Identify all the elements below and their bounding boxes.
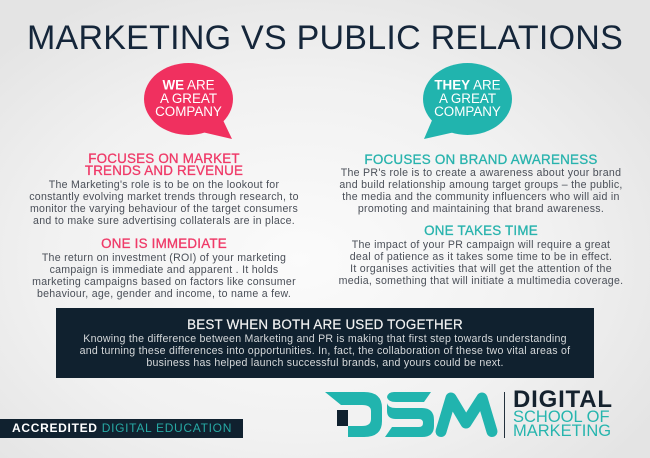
speech bubble: public relations: THEY ARE: [434, 78, 501, 92]
speech bubble: public relations: [423, 63, 512, 139]
speech bubble: marketing: [144, 63, 233, 139]
accreditation banner: ACCREDITED DIGITAL EDUCATION: [12, 421, 232, 435]
title: MARKETING VS PUBLIC RELATIONS: [27, 18, 623, 56]
PR text: focuses: The PR's role is to create a awareness about your brand: [341, 167, 621, 179]
marketing text: immediate: marketing campaigns based on factors like consumer: [32, 276, 296, 288]
marketing text: focuses: constantly evolving market trends through research, to: [29, 191, 299, 203]
PR text: focuses: promoting and maintaining that brand awareness.: [358, 203, 604, 215]
PR heading: takes time: ONE TAKES TIME: [424, 223, 538, 238]
DSM logo: [325, 392, 498, 437]
PR text: focuses: the media and the community influencers who will aid in: [342, 191, 620, 203]
PR text: focuses: [339, 167, 623, 215]
logo letter D: [325, 392, 382, 437]
logo text: school of marketing: SCHOOL OF: [513, 408, 610, 426]
panel text: and turning these differences into opportunities. In, fact, the collaboration of these two vital areas of: [80, 345, 570, 357]
PR text: takes time: [339, 239, 623, 287]
marketing text: focuses: [29, 179, 299, 227]
speech bubble: public relations: A GREAT: [439, 91, 496, 106]
panel heading: BEST WHEN BOTH ARE USED TOGETHER: [187, 317, 463, 332]
panel text: [80, 333, 570, 369]
panel text: business has helped launch successful brands, and yours could be next.: [146, 357, 504, 369]
logo text: digital: DIGITAL: [513, 386, 613, 413]
panel text: Knowing the difference between Marketing and PR is making that first step towards understanding: [83, 333, 567, 345]
logo text: school of marketing: MARKETING: [513, 422, 611, 440]
speech bubble: public relations: COMPANY: [434, 104, 501, 119]
logo divider: [504, 392, 505, 438]
accreditation banner: [0, 419, 243, 438]
PR text: takes time: deal of patience as it takes some time to be in effect.: [350, 251, 612, 263]
logo letter S: [385, 392, 434, 437]
PR text: takes time: media, something that will initiate a multimedia coverage.: [339, 275, 623, 287]
marketing text: immediate: campaign is immediate and apparent . It holds: [50, 264, 278, 276]
speech bubble: marketing: WE ARE: [162, 78, 215, 92]
marketing heading: immediate: ONE IS IMMEDIATE: [101, 236, 227, 250]
panel: best when both are used together: [56, 308, 594, 378]
marketing heading: focuses: [85, 151, 243, 178]
PR text: takes time: The impact of your PR campaign will require a great: [352, 239, 610, 251]
marketing text: immediate: behaviour, age, gender and income, to name a few.: [37, 288, 291, 300]
marketing heading: focuses: FOCUSES ON MARKET: [88, 151, 240, 166]
marketing text: focuses: monitor the varying behaviour of the target consumers: [30, 203, 298, 215]
marketing text: focuses: and to make sure advertising collaterals are in place.: [33, 215, 295, 227]
speech bubble: marketing: A GREAT: [160, 91, 217, 106]
logo text: school of marketing: [513, 408, 611, 440]
PR text: takes time: It organises activities that will get the attention of the: [350, 263, 612, 275]
marketing text: immediate: The return on investment (ROI) of your marketing: [42, 252, 286, 264]
marketing heading: focuses: TRENDS AND REVENUE: [85, 162, 243, 178]
PR heading: focuses: FOCUSES ON BRAND AWARENESS: [364, 152, 598, 166]
marketing text: focuses: The Marketing's role is to be on the lookout for: [49, 179, 279, 191]
logo letter M: [441, 398, 492, 432]
PR text: focuses: and build relationship amoung target groups – the public,: [339, 179, 623, 191]
speech bubble: marketing: COMPANY: [155, 104, 222, 119]
marketing text: immediate: [32, 252, 296, 300]
